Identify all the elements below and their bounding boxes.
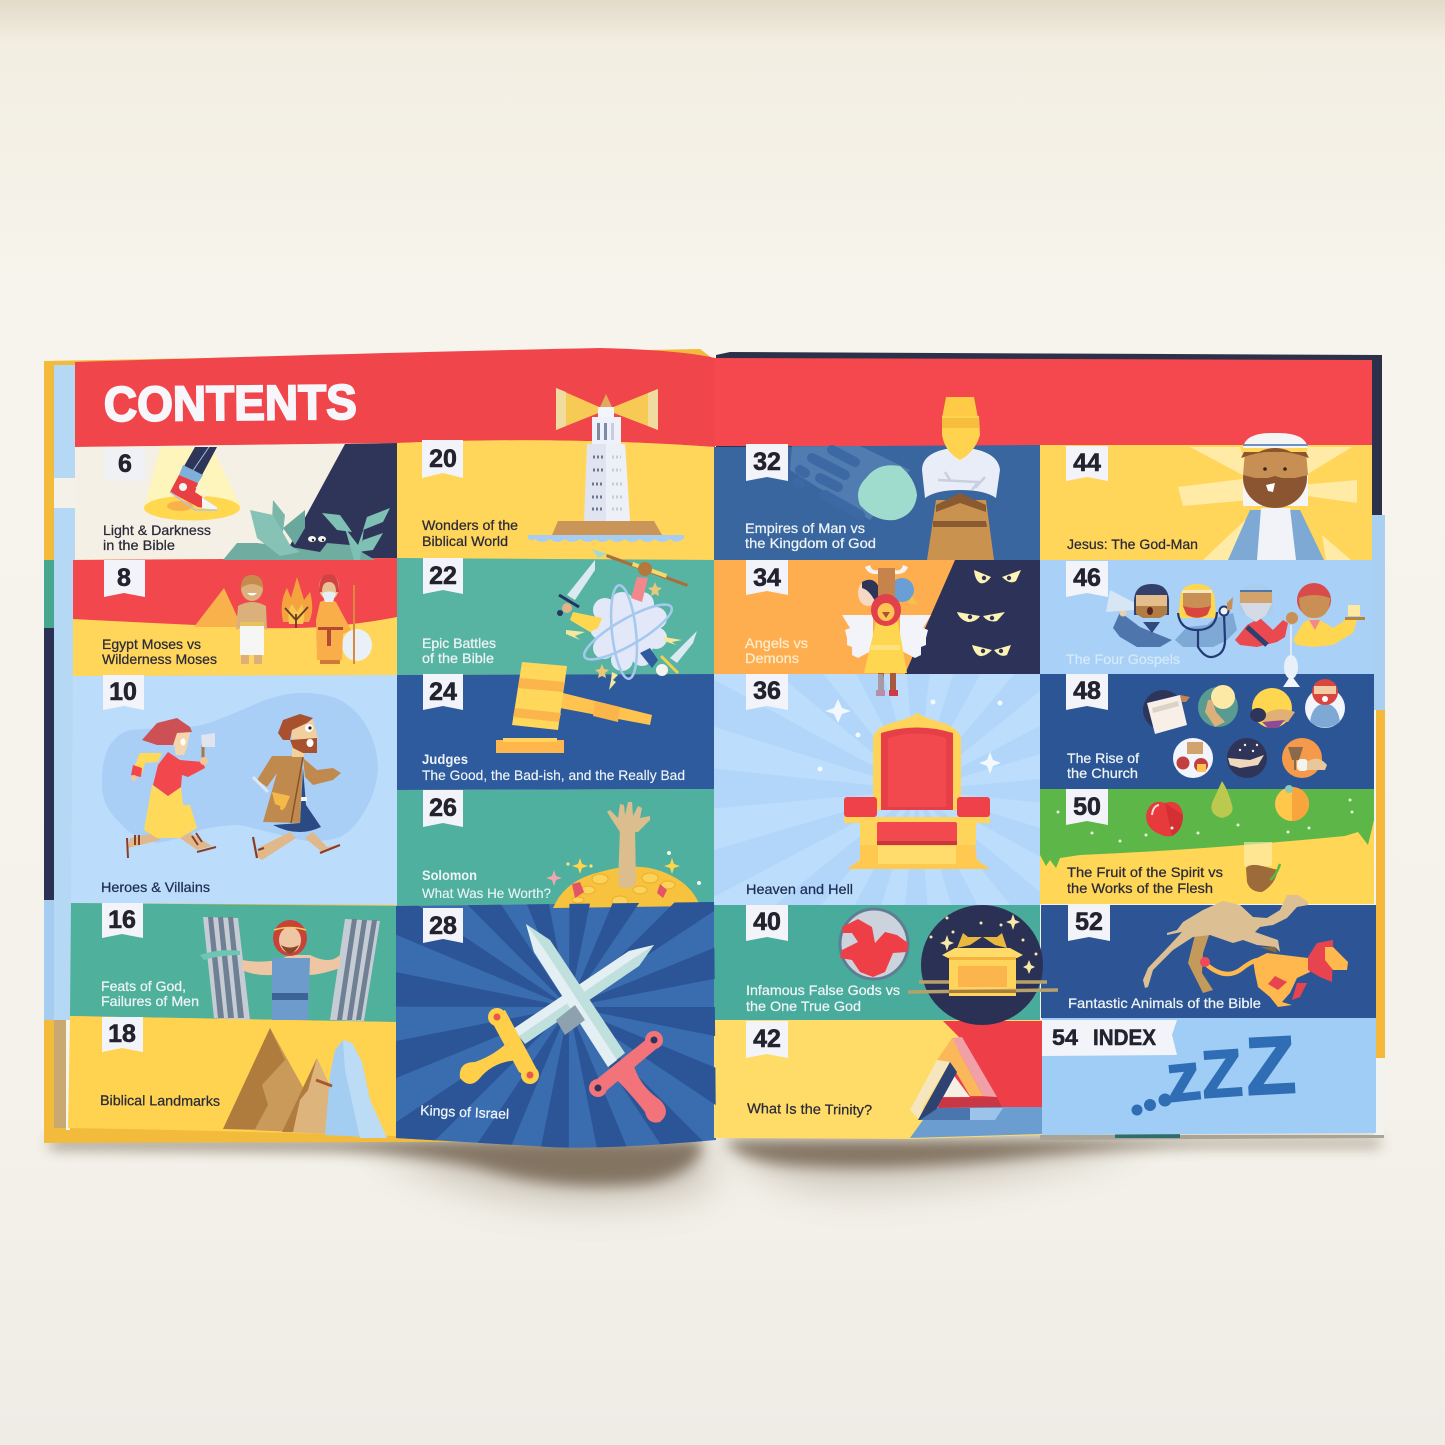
illustration: ark of the covenant [908,905,1058,1025]
label: Empires of Man vs the Kingdom of God [745,520,876,551]
label: Feats of God, Failures of Men: Failures of Men [101,993,199,1009]
illustration: Luke with stethoscope [1175,584,1237,657]
icon: rotten fruit [1244,842,1280,892]
banner: 54 INDEX [1042,1020,1177,1056]
panel: 32 background [714,445,1040,560]
illustration: Jesus figure [1228,433,1324,560]
illustration: throne [844,713,990,869]
panel: 22 background [397,558,715,675]
label: The Rise of the Church: the Church [1067,765,1138,781]
label: Jesus: The God-Man: Jesus: The God-Man [1067,536,1198,552]
badge: 32: 32 [753,448,781,476]
badge: 40: 40 [753,908,781,936]
illustration: heaven rays [714,674,1040,905]
badge: 48 [1066,674,1108,710]
label: Infamous False Gods vs the One True God: the One True God [746,998,861,1014]
label: Feats of God, Failures of Men [101,978,199,1009]
label: The Four Gospels: The Four Gospels [1066,651,1180,667]
badge: 36: 36 [753,677,781,705]
badge: 18: 18 [108,1020,136,1048]
illustration: crossed swords [460,924,666,1123]
icon: praying man [1305,679,1345,728]
badge: 42: 42 [753,1025,781,1053]
icon: fish tail [1283,675,1300,687]
badge: 22: 22 [429,562,457,590]
illustration: shoe in spotlight [144,447,240,520]
badge: 22 [423,558,463,594]
badge: 10 [103,675,144,710]
illustration: Samson and pillars [200,917,380,1021]
illustration: church icon circles [1143,675,1345,778]
illustration: three-headed dog in mirror [840,909,908,979]
badge: 24 [423,674,463,710]
illustration: fruits [1056,781,1354,892]
panel: 48 background [1040,674,1374,789]
panel: 8 background [73,558,397,676]
label: Empires of Man vs the Kingdom of God: the Kingdom of God [745,535,876,551]
label: Angels vs Demons: Angels vs [745,635,808,651]
badge: 18 [102,1017,143,1052]
icon: apple [1146,802,1183,836]
badge: 20 [422,440,463,478]
panel: 20 background [397,440,715,560]
book shadow soft [360,1140,1150,1204]
badge: 32 [746,444,788,481]
panel: 24 background [397,674,715,790]
badge: 46 [1066,561,1108,597]
panel: 6 dark side [282,443,397,560]
book cover: right dark [716,352,1382,520]
illustration: trinity triangle [910,1037,1003,1120]
illustration: gavel [496,662,652,753]
panel: 44 background [1040,445,1372,560]
illustration: lion [1200,940,1348,1007]
badge: 24: 24 [429,678,457,706]
label: The Rise of the Church: The Rise of [1067,750,1139,766]
panel: red header right [714,358,1372,446]
badge: 48: 48 [1073,677,1101,705]
label: Angels vs Demons: Demons [745,650,799,666]
label: What Is the Trinity?: What Is the Trinity? [747,1100,872,1118]
icon: speech bubble [1198,685,1238,727]
panel: 10 background [71,675,397,905]
badge: 50 [1066,789,1108,825]
illustration: snoring zZZ [1132,1019,1298,1117]
specks [1056,798,1354,842]
label: Judges: The Good, the Bad-ish, and the Really Bad [422,767,685,783]
badge: 8: 8 [117,564,131,592]
label: Infamous False Gods vs the One True God: Infamous False Gods vs [746,982,900,998]
illustration: Mark with cup [1284,583,1365,679]
badge: 46: 46 [1073,564,1101,592]
panel: 34 background [714,560,1040,674]
label: Judges: Judges [422,751,468,767]
label: Feats of God, Failures of Men: Feats of God, [101,978,186,994]
label: Epic Battles of the Bible: Epic Battles [422,635,496,651]
illustration: camel [1143,895,1308,993]
book shadow [50,1140,1380,1186]
illustration: demon eyes [957,570,1021,656]
panel: 52 background [1041,905,1376,1018]
page edge strips right [1040,515,1385,1140]
illustration: Wilderness Moses with sheep [316,574,372,664]
label: The Fruit of the Spirit vs the Works of the Flesh [1067,864,1223,896]
panel: 42 blue corner [910,1107,1042,1138]
panel: 6 background [75,443,397,560]
badge: 8 [104,560,145,597]
icon: yellow fruit [1275,785,1309,821]
label: Biblical Landmarks: Biblical Landmarks [100,1092,220,1109]
title: CONTENTS: CONTENTS [104,376,357,432]
panel: 28 background [396,902,716,1148]
badge: 6: 6 [118,450,132,478]
panel: 26 background [397,789,715,906]
label: Heroes & Villains: Heroes & Villains [101,879,210,895]
illustration: John [1235,584,1298,647]
label: Solomon What Was He Worth?: Solomon [422,867,477,883]
label: Infamous False Gods vs the One True God [746,982,900,1014]
panel: 54 background [1042,1018,1376,1135]
icon: cup and bread [1282,738,1327,778]
label: Kings of Israel: Kings of Israel [420,1102,509,1122]
label: Wonders of the Biblical World: Wonders of the [422,517,518,533]
icon: worship [1250,688,1295,728]
badge: 34: 34 [753,564,781,592]
badge: 44: 44 [1073,449,1101,477]
badge: 34 [746,560,788,595]
badge: 44 [1066,446,1108,481]
label: The Fruit of the Spirit vs the Works of the Flesh: the Works of the Flesh [1067,880,1213,896]
illustration: hand and treasure [546,802,701,908]
book cover: left yellow [44,349,712,1143]
badge: 16: 16 [108,906,136,934]
panel: 16 background [70,903,396,1022]
illustration: four-faced angel [842,565,931,696]
badge: 52: 52 [1075,908,1103,936]
label: The Rise of the Church [1067,750,1139,781]
illustration: snoring zZZ: z [1163,1038,1204,1117]
badge: 36 [746,674,788,710]
badge: 28 [423,908,463,943]
panel: red header left [75,348,715,447]
label: Light & Darkness [103,522,211,553]
label: Egypt Moses vs Wilderness Moses [102,636,217,667]
label: Epic Battles of the Bible: of the Bible [422,650,494,666]
panel: 18 background [68,1016,396,1136]
badge: 52 [1068,905,1110,941]
label: Judges [422,751,685,783]
label: Fantastic Animals of the Bible: Fantastic Animals of the Bible [1068,995,1261,1011]
label: Egypt Moses vs Wilderness Moses: Wilderness Moses [102,651,217,667]
label: Angels vs Demons [745,635,808,666]
icon: pear [1211,781,1233,818]
label: Empires of Man vs the Kingdom of God: Empires of Man vs [745,520,865,536]
illustration: plants and eyes [223,500,390,560]
figure: man with honey [253,714,341,860]
illustration: burning bush [282,577,312,628]
badge: 26 [423,790,463,827]
label: Light & Darkness: in the Bible [103,537,175,553]
banner: 54 INDEX: INDEX [1093,1025,1156,1050]
badge: 20: 20 [429,445,457,473]
illustration: sword burst rays [429,867,709,1147]
label: Solomon What Was He Worth? [422,867,551,901]
panel: 34 dark side [905,560,1040,674]
illustration: statue king [922,397,1000,560]
illustration: Jesus with rays [1178,447,1357,560]
illustration: flying rock [790,446,917,520]
badge: 10: 10 [109,678,137,706]
illustration: lighthouse [528,388,684,542]
figure: woman with axe [127,718,216,858]
illustration: Matthew with megaphone [1106,584,1172,647]
panel: 42 red corner [935,1021,1042,1107]
panel: 50 green upper [1040,789,1374,868]
badge: 42 [746,1021,788,1058]
illustration: Egypt Moses [236,575,267,664]
label: The Fruit of the Spirit vs the Works of the Flesh: The Fruit of the Spirit vs [1067,864,1223,880]
badge: 26: 26 [429,794,457,822]
banner: 54 INDEX: 54 [1052,1025,1079,1050]
illustration: sparkles [818,699,1002,774]
illustration: running figures [102,693,378,860]
badge: 40 [746,905,788,941]
badge: 50: 50 [1073,793,1101,821]
panel: 42 background [714,1020,1042,1139]
badge: 6 [105,447,145,481]
panel: 50 background [1040,789,1374,904]
label: Light & Darkness: Light & Darkness [103,522,211,538]
label: Wonders of the Biblical World [422,517,518,549]
icon: three faces [1173,738,1213,778]
label: Epic Battles of the Bible [422,635,496,666]
label: Heaven and Hell: Heaven and Hell [746,881,853,897]
illustration: pyramid [194,588,242,627]
panel: 8 red upper [73,558,397,628]
panel: 46 background [1040,560,1374,674]
icon: scroll [1143,690,1190,734]
illustration: mountains [223,1028,387,1138]
icon: hand and stars [1227,738,1267,778]
panel: 40 background [714,905,1040,1020]
panel: 36 background [714,674,1040,905]
illustration: snoring zZZ: Z [1243,1019,1298,1113]
illustration: warrior with swords and cloud [557,549,697,690]
label: Egypt Moses vs Wilderness Moses: Egypt Moses vs [102,636,201,652]
badge: 16 [102,903,143,938]
illustration: snoring zZZ: Z [1199,1035,1245,1113]
label: Solomon What Was He Worth?: What Was He Worth? [422,885,551,901]
page edge strips left [44,365,75,1130]
badge: 28: 28 [429,912,457,940]
label: Wonders of the Biblical World: Biblical World [422,533,508,549]
